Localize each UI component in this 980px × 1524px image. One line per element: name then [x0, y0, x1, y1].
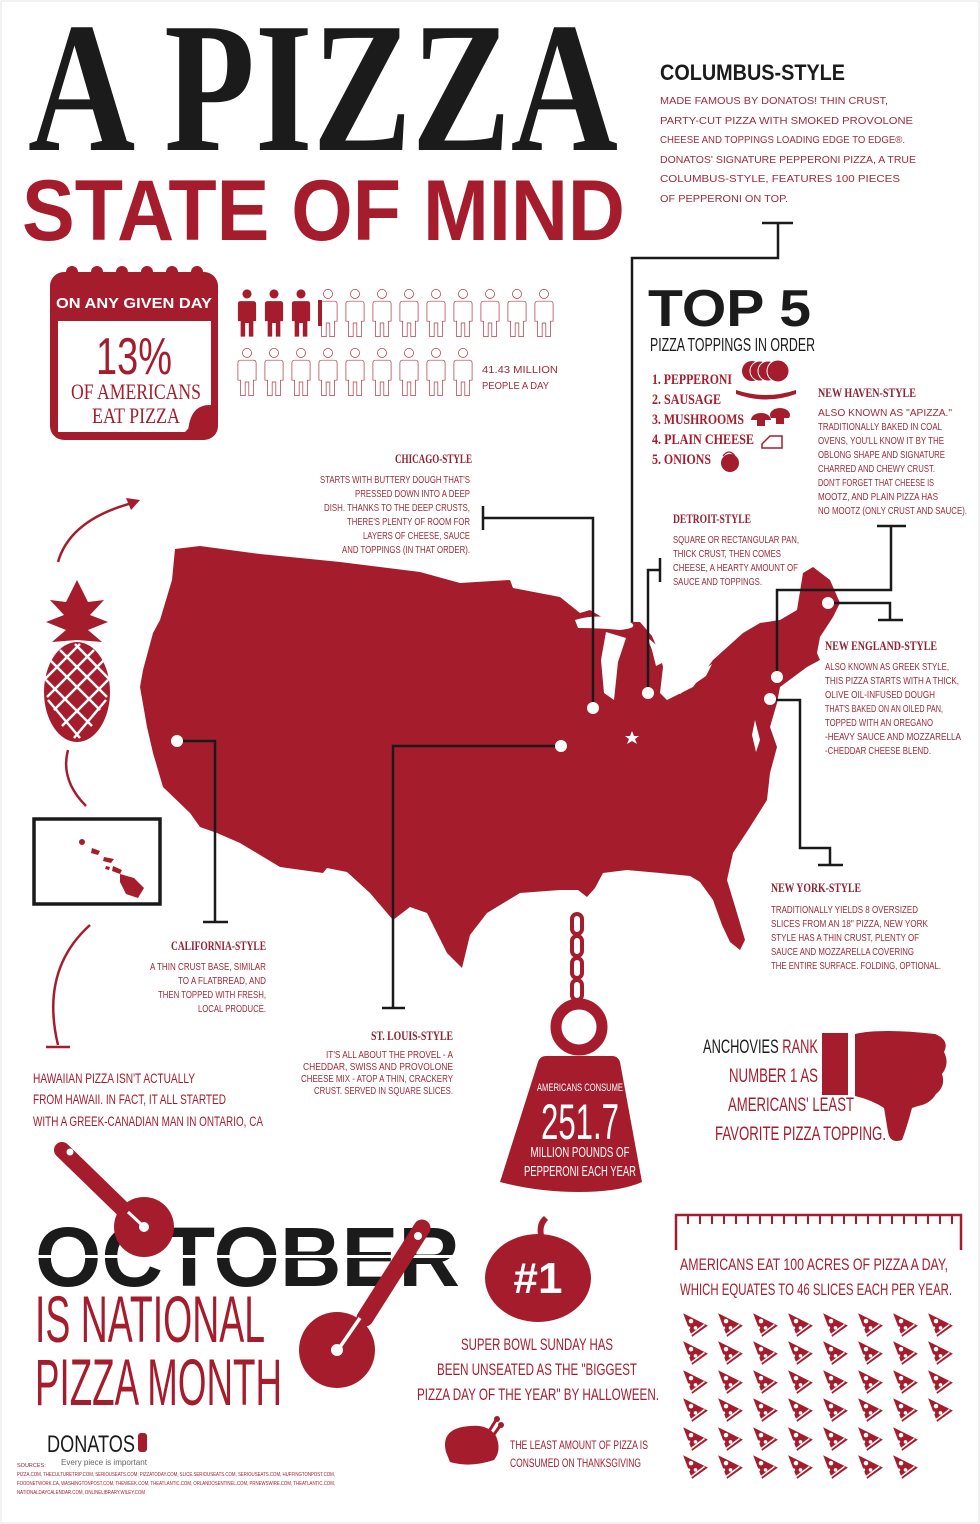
pictogram: people: 41.43 MILLION — [482, 365, 558, 376]
text: is national pizza month: PIZZA MONTH — [35, 1345, 282, 1419]
icon: turkey — [445, 1416, 504, 1465]
text block: columbus-style — [660, 60, 916, 205]
text: sources: PIZZA.COM, THECULTURETRIP.COM, SERIOUSEATS.COM, PIZZATODAY.COM, SLICE.SERIOUSEATS.COM, SERIOUSEATS.COM, HUFFINGTONPOST.COM, — [17, 1472, 335, 1478]
text block: california-style: A THIN CRUST BASE, SIMILAR — [150, 962, 266, 973]
text block: columbus-style: DONATOS' SIGNATURE PEPPERONI PIZZA, A TRUE — [660, 155, 916, 166]
list: toppings: 2. SAUSAGE — [652, 392, 721, 408]
text: PIZZA TOPPINGS IN ORDER — [650, 335, 815, 355]
callout: anchovies — [703, 1037, 886, 1145]
text block: detroit-style — [673, 511, 799, 588]
pins and connectors on map — [171, 506, 906, 1008]
text: super bowl: BEEN UNSEATED AS THE "BIGGEST — [437, 1360, 637, 1379]
icons: toppings — [721, 360, 796, 472]
text: hawaiian pizza fact — [33, 1070, 263, 1129]
logo: donatos: DONATOS — [47, 1431, 135, 1458]
calendar: 13% of americans: ON ANY GIVEN DAY — [56, 295, 212, 312]
logo: donatos — [47, 1431, 148, 1467]
text: sources — [17, 1463, 335, 1496]
callout: anchovies: ANCHOVIES RANK — [703, 1037, 818, 1058]
text block: st. louis-style: CRUST. SERVED IN SQUARE SLICES. — [314, 1086, 453, 1097]
pictogram: people: PEOPLE A DAY — [482, 381, 549, 392]
text: super bowl — [417, 1335, 659, 1404]
text block: detroit-style: THICK CRUST, THEN COMES — [673, 549, 781, 560]
map: united states — [140, 546, 840, 968]
logo: donatos: Every piece is important — [61, 1457, 148, 1467]
text: super bowl: PIZZA DAY OF THE YEAR" BY HALLOWEEN. — [417, 1385, 659, 1404]
text block: california-style: CALIFORNIA-STYLE — [171, 938, 266, 953]
text block: st. louis-style: CHEESE MIX - ATOP A THIN, CRACKERY — [301, 1074, 453, 1085]
heading: top 5: TOP 5 — [648, 280, 811, 338]
text block: columbus-style: COLUMBUS-STYLE, FEATURES 100 PIECES — [660, 174, 900, 185]
text block: chicago-style — [320, 451, 472, 556]
text block: new england-style: ALSO KNOWN AS GREEK STYLE, — [825, 662, 949, 673]
text block: new england-style: TOPPED WITH AN OREGANO — [825, 718, 933, 729]
text block: st. louis-style: ST. LOUIS-STYLE — [371, 1028, 453, 1043]
map: hawaii inset — [34, 819, 160, 904]
calendar: 13% of americans: OF AMERICANS — [71, 379, 201, 404]
text block: chicago-style: STARTS WITH BUTTERY DOUGH THAT'S — [320, 475, 470, 486]
text: hawaiian pizza fact: WITH A GREEK-CANADIAN MAN IN ONTARIO, CA — [33, 1113, 263, 1129]
text block: st. louis-style — [301, 1028, 453, 1097]
text: 100 acres — [680, 1255, 952, 1299]
text block: chicago-style: AND TOPPINGS (IN THAT ORDER). — [342, 545, 470, 556]
text block: new haven-style: TRADITIONALLY BAKED IN COAL — [818, 422, 942, 433]
arrow: hawaii to text — [46, 925, 90, 1047]
text block: columbus-style: OF PEPPERONI ON TOP. — [660, 194, 788, 205]
text: is national pizza month — [35, 1282, 282, 1419]
text: sources: SOURCES: — [17, 1463, 46, 1469]
text block: new england-style — [825, 638, 961, 757]
text block: chicago-style: DISH. THANKS TO THE DEEP CRUSTS, — [324, 503, 470, 514]
icon: pizza cutter 2 — [299, 1228, 422, 1388]
text block: california-style: TO A FLATBREAD, AND — [178, 976, 266, 987]
text block: detroit-style: DETROIT-STYLE — [673, 511, 751, 526]
text block: chicago-style: CHICAGO-STYLE — [395, 451, 472, 466]
icon: pumpkin #1: #1 — [514, 1254, 562, 1303]
text block: st. louis-style: IT'S ALL ABOUT THE PROVEL - A — [326, 1050, 453, 1061]
text block: new haven-style: OBLONG SHAPE AND SIGNATURE — [818, 450, 945, 461]
heading: october: OCTOBER — [35, 1210, 460, 1304]
text block: new york-style — [771, 880, 941, 972]
callout: anchovies: FAVORITE PIZZA TOPPING. — [715, 1124, 886, 1145]
text block: new haven-style: OVENS, YOU'LL KNOW IT BY THE — [818, 436, 944, 447]
text block: new haven-style: MOOTZ, AND PLAIN PIZZA HAS — [818, 492, 938, 503]
list: toppings — [652, 372, 754, 468]
calendar: 13% of americans: EAT PIZZA — [92, 403, 180, 428]
icon: pineapple with arrows — [44, 498, 140, 806]
text block: detroit-style: SAUCE AND TOPPINGS. — [673, 577, 762, 588]
text block: columbus-style: MADE FAMOUS BY DONATOS! THIN CRUST, — [660, 96, 888, 107]
list: toppings: 4. PLAIN CHEESE — [652, 432, 754, 448]
text block: new york-style: NEW YORK-STYLE — [771, 880, 861, 895]
text block: new york-style: SLICES FROM AN 18" PIZZA, NEW YORK — [771, 919, 928, 930]
callout: anchovies: NUMBER 1 AS — [729, 1066, 818, 1087]
text: sources: NATIONALDAYCALENDAR.COM, ONLINELIBRARY.WILEY.COM — [17, 1490, 145, 1496]
callout: anchovies: AMERICANS' LEAST — [728, 1095, 854, 1116]
text: thanksgiving: CONSUMED ON THANKSGIVING — [510, 1456, 641, 1470]
text: thanksgiving — [510, 1438, 648, 1470]
pictogram: 46 pizza slices — [683, 1313, 953, 1479]
text: hawaiian pizza fact: FROM HAWAII. IN FACT, IT ALL STARTED — [33, 1091, 226, 1107]
text: is national pizza month: IS NATIONAL — [35, 1282, 265, 1356]
text block: new haven-style: CHARRED AND CHEWY CRUST. — [818, 464, 935, 475]
text block: new haven-style: NEW HAVEN-STYLE — [818, 385, 916, 400]
text block: st. louis-style: CHEDDAR, SWISS AND PROVOLONE — [303, 1062, 453, 1073]
icon: pumpkin #1 — [485, 1216, 591, 1322]
icon: chain and weight with pepperoni stat: 251.7 — [541, 1094, 619, 1150]
icon: chain and weight with pepperoni stat: AMERICANS CONSUME — [537, 1082, 623, 1094]
text block: chicago-style: LAYERS OF CHEESE, SAUCE — [363, 531, 470, 542]
icon: chain and weight with pepperoni stat: PEPPERONI EACH YEAR — [524, 1163, 636, 1180]
icon: chain and weight with pepperoni stat — [500, 914, 642, 1192]
text block: california-style: LOCAL PRODUCE. — [198, 1004, 266, 1015]
text block: new haven-style: DON'T FORGET THAT CHEESE IS — [818, 478, 934, 489]
text block: new haven-style — [818, 385, 967, 517]
icon: pizza cutter 1 — [62, 1148, 174, 1257]
text: sources: FOODNETWORK.CA, WASHINGTONPOST.COM, THEWEEK.COM, THEATLANTIC.COM, ORLANDOSENTINEL.COM, PRNEWSWIRE.COM, THEATLANTIC.COM, — [17, 1481, 335, 1487]
text block: columbus-style: CHEESE AND TOPPINGS LOADING EDGE TO EDGE®. — [660, 135, 905, 146]
text block: new england-style: NEW ENGLAND-STYLE — [825, 638, 937, 653]
list: toppings: 1. PEPPERONI — [652, 372, 732, 388]
text block: detroit-style: SQUARE OR RECTANGULAR PAN, — [673, 535, 799, 546]
text block: california-style: THEN TOPPED WITH FRESH, — [158, 990, 266, 1001]
calendar: 13% of americans — [50, 266, 218, 440]
list: toppings: 3. MUSHROOMS — [652, 412, 744, 428]
text block: new haven-style: ALSO KNOWN AS "APIZZA." — [818, 408, 952, 419]
connector: columbus to star — [632, 223, 793, 732]
text block: new york-style: TRADITIONALLY YIELDS 8 OVERSIZED — [771, 905, 918, 916]
text block: new york-style: STYLE HAS A THIN CRUST, PLENTY OF — [771, 933, 919, 944]
text: thanksgiving: THE LEAST AMOUNT OF PIZZA IS — [510, 1438, 648, 1452]
text block: new england-style: OLIVE OIL-INFUSED DOUGH — [825, 690, 935, 701]
icon: thumbs down — [822, 1031, 947, 1141]
icon: chain and weight with pepperoni stat: MILLION POUNDS OF — [530, 1144, 630, 1161]
calendar: 13% of americans: 13% — [96, 328, 172, 386]
text: super bowl: SUPER BOWL SUNDAY HAS — [461, 1335, 613, 1354]
text block: detroit-style: CHEESE, A HEARTY AMOUNT OF — [673, 563, 798, 574]
list: toppings: 5. ONIONS — [652, 452, 711, 468]
text block: california-style — [150, 938, 266, 1015]
text: hawaiian pizza fact: HAWAIIAN PIZZA ISN'T ACTUALLY — [33, 1070, 195, 1086]
text block: chicago-style: PRESSED DOWN INTO A DEEP — [355, 489, 470, 500]
pictogram: people — [238, 289, 558, 396]
text block: columbus-style: COLUMBUS-STYLE — [660, 60, 845, 85]
icon: ruler — [676, 1215, 961, 1250]
text block: new york-style: SAUCE AND MOZZARELLA COVERING — [771, 947, 914, 958]
text block: chicago-style: THERE'S PLENTY OF ROOM FOR — [347, 517, 470, 528]
text block: columbus-style: PARTY-CUT PIZZA WITH SMOKED PROVOLONE — [660, 116, 913, 127]
subtitle: STATE OF MIND: STATE OF MIND — [22, 163, 625, 259]
text block: new england-style: -CHEDDAR CHEESE BLEND. — [825, 746, 931, 757]
